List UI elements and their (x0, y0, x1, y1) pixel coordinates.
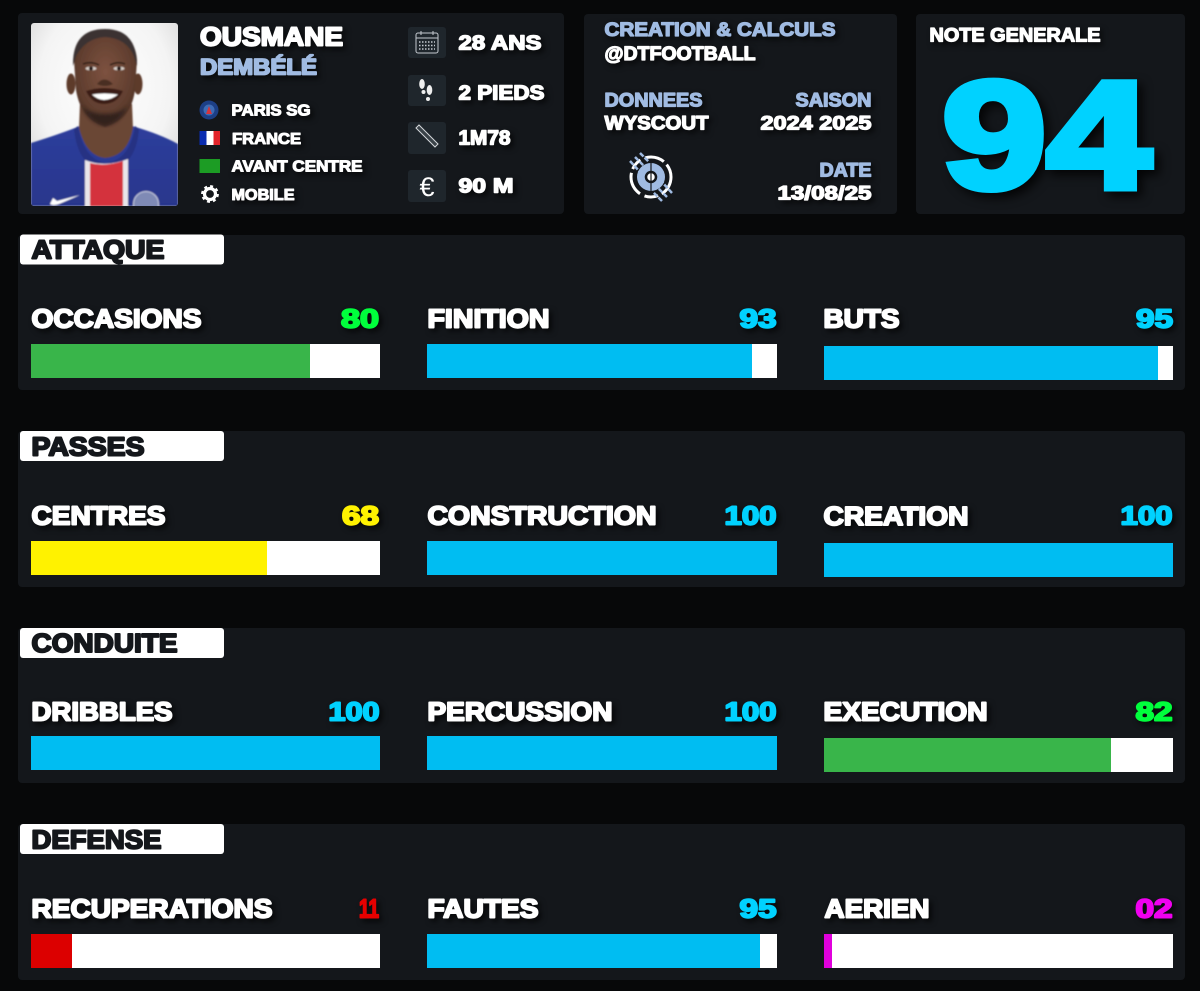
player portrait (31, 23, 178, 216)
metric: recuperations: RECUPERATIONS (32, 894, 272, 924)
metric: recuperations (31, 894, 380, 968)
club: PARIS SG (232, 102, 310, 120)
section tag (20, 628, 224, 658)
icon: euro: € (419, 172, 435, 202)
section tag: DEFENSE (32, 826, 162, 854)
last name: DEMBÉLÉ (200, 54, 317, 80)
height: 1M78 (458, 128, 510, 150)
market value: 90 M (458, 176, 514, 198)
metric: buts: 95 (1136, 304, 1173, 334)
panel: overall rating (916, 14, 1185, 221)
metric: occasions (31, 304, 380, 378)
section: attaque (18, 234, 1185, 390)
metric: dribbles (31, 696, 380, 770)
section tag (20, 431, 224, 462)
metric: finition: FINITION (428, 304, 550, 334)
section tag (20, 824, 224, 854)
metric: centres: CENTRES (32, 500, 166, 530)
icon: ruler (408, 122, 446, 154)
position: AVANT CENTRE (232, 158, 362, 176)
section tag (20, 234, 224, 264)
metric: finition (427, 304, 777, 378)
metric: dribbles: DRIBBLES (32, 696, 172, 726)
metric: aerien (824, 894, 1173, 968)
icon: club badge (200, 100, 218, 120)
credits heading: CREATION & CALCULS (604, 20, 836, 41)
icon: footprints (408, 75, 446, 106)
panel: player profile (18, 13, 564, 216)
metric: execution (824, 696, 1173, 772)
section tag: ATTAQUE (32, 236, 164, 264)
date value: 13/08/25 (778, 184, 872, 204)
metric: aerien: 02 (1136, 894, 1172, 924)
metric: execution: EXECUTION (824, 696, 988, 726)
metric: percussion: 100 (724, 696, 776, 726)
metric: creation: CREATION (824, 501, 968, 531)
metric: centres (31, 500, 380, 575)
metric: percussion: PERCUSSION (428, 696, 612, 726)
metric: execution: 82 (1136, 696, 1172, 726)
metric: centres: 68 (342, 500, 379, 530)
icon: calendar (408, 27, 446, 58)
metric: creation (824, 500, 1173, 577)
data source: WYSCOUT (604, 114, 709, 134)
section: passes (18, 431, 1185, 587)
metric: aerien: AERIEN (824, 894, 930, 924)
metric: finition: 93 (740, 304, 776, 334)
metric: dribbles: 100 (328, 696, 380, 726)
season label: SAISON (796, 90, 872, 112)
icon: euro (408, 170, 446, 202)
metric: fautes: 95 (740, 894, 776, 924)
metric: fautes (427, 894, 777, 968)
metric: recuperations: 11 (359, 894, 379, 924)
metric: fautes: FAUTES (428, 894, 538, 924)
metric: buts (824, 304, 1173, 380)
panel: credits (584, 14, 897, 214)
icon: logo (630, 153, 672, 201)
metric: occasions: OCCASIONS (32, 304, 202, 334)
section: defense (18, 824, 1185, 980)
age: 28 ANS (458, 32, 542, 54)
metric: occasions: 80 (341, 304, 379, 334)
season value: 2024 2025 (760, 114, 872, 134)
metric: percussion (427, 696, 777, 770)
icon: pitch position (200, 159, 220, 173)
icon: french flag (200, 131, 220, 145)
section tag: CONDUITE (32, 630, 178, 658)
metric: buts: BUTS (824, 304, 900, 334)
country: FRANCE (232, 131, 301, 148)
overall score: 94 (942, 50, 1151, 221)
metric: construction: 100 (724, 500, 776, 530)
author handle: @DTFOOTBALL (604, 44, 756, 65)
metric: construction: CONSTRUCTION (428, 500, 656, 530)
metric: construction (427, 500, 777, 575)
metric: creation: 100 (1120, 500, 1172, 530)
data label: DONNEES (604, 90, 702, 112)
date label: DATE (820, 160, 872, 182)
section: conduite (18, 628, 1185, 783)
first name: OUSMANE (200, 24, 343, 52)
icon: gear (202, 186, 218, 202)
role: MOBILE (232, 187, 294, 204)
section tag: PASSES (32, 434, 144, 462)
foot: 2 PIEDS (458, 82, 544, 104)
rating heading: NOTE GENERALE (930, 26, 1100, 46)
